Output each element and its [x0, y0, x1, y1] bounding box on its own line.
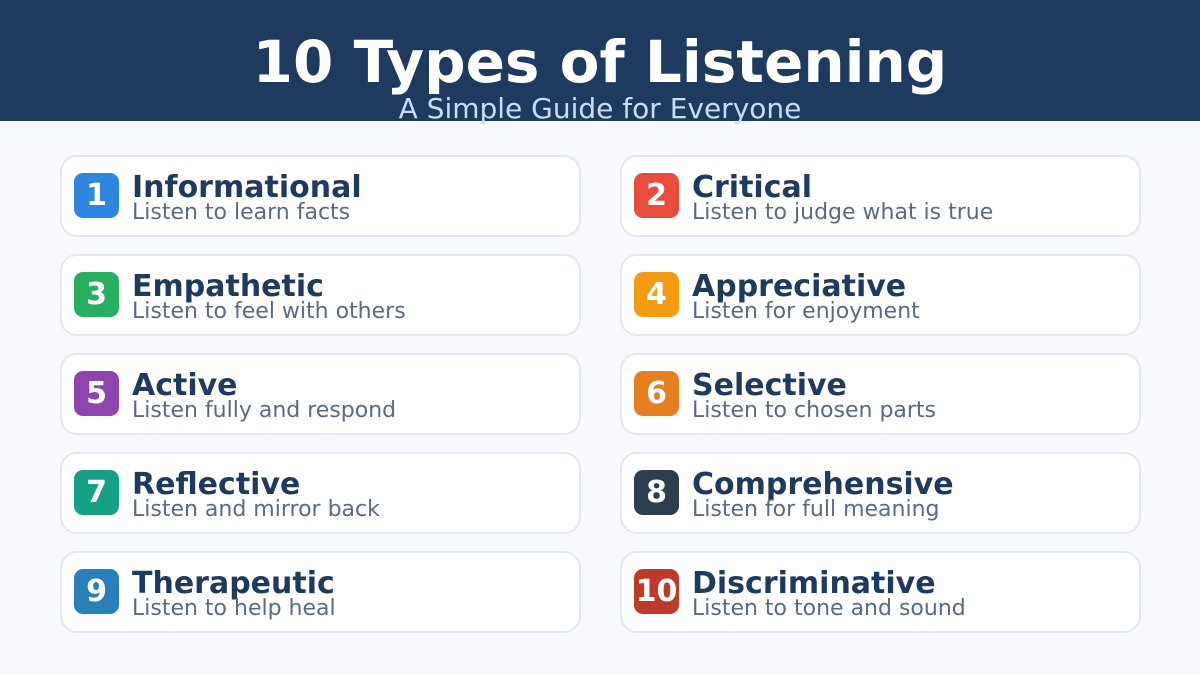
text: Empathetic: Empathetic — [132, 269, 324, 304]
text: Reflective: Reflective — [132, 467, 300, 502]
card 4: Appreciative — [621, 255, 1140, 335]
text: Informational — [132, 170, 362, 225]
badge 6 — [634, 371, 679, 416]
card 5: Active — [61, 354, 580, 434]
card 10: Discriminative — [621, 552, 1140, 632]
text: Discriminative: Listen to tone and sound — [692, 596, 966, 621]
text: Active — [132, 368, 396, 423]
text: Empathetic: Listen to feel with others — [132, 299, 406, 324]
text: Discriminative — [692, 566, 966, 621]
text: Selective: Listen to chosen parts — [692, 398, 936, 423]
card 8: Comprehensive — [621, 453, 1140, 533]
card 1: Informational — [61, 156, 580, 236]
text: Appreciative: Appreciative — [692, 269, 906, 304]
badge 10: 10 — [636, 574, 677, 609]
badge 7: 7 — [86, 475, 107, 510]
badge 6: 6 — [646, 376, 667, 411]
badge 7 — [74, 470, 119, 515]
badge 2 — [634, 173, 679, 218]
text: Appreciative: Listen for enjoyment — [692, 299, 920, 324]
badge 1: 1 — [86, 178, 107, 213]
text: Selective: Selective — [692, 368, 847, 403]
badge 3: 3 — [86, 277, 107, 312]
text: Reflective — [132, 467, 380, 522]
text: Discriminative: Discriminative — [692, 566, 936, 601]
text: Selective — [692, 368, 936, 423]
card 3: Empathetic — [61, 255, 580, 335]
card 7: Reflective — [61, 453, 580, 533]
text: Critical — [692, 170, 993, 225]
header banner — [0, 0, 1200, 121]
text: Comprehensive — [692, 467, 954, 522]
badge 5 — [74, 371, 119, 416]
badge 9: 9 — [86, 574, 107, 609]
text: Comprehensive: Listen for full meaning — [692, 497, 940, 522]
text: Therapeutic: Listen to help heal — [132, 596, 336, 621]
badge 1 — [74, 173, 119, 218]
card 6: Selective — [621, 354, 1140, 434]
badge 8 — [634, 470, 679, 515]
text: Comprehensive: Comprehensive — [692, 467, 954, 502]
subtitle: A Simple Guide for Everyone — [399, 92, 801, 125]
text: Critical: Listen to judge what is true — [692, 200, 993, 225]
badge 8: 8 — [646, 475, 667, 510]
title: 10 Types of Listening — [253, 28, 947, 96]
text: Active: Active — [132, 368, 238, 403]
text: Reflective: Listen and mirror back — [132, 497, 380, 522]
text: Empathetic — [132, 269, 406, 324]
badge 4: 4 — [646, 277, 667, 312]
text: Active: Listen fully and respond — [132, 398, 396, 423]
badge 3 — [74, 272, 119, 317]
badge 4 — [634, 272, 679, 317]
badge 2: 2 — [646, 178, 667, 213]
card 2: Critical — [621, 156, 1140, 236]
badge 9 — [74, 569, 119, 614]
badge 5: 5 — [86, 376, 107, 411]
text: Therapeutic — [132, 566, 336, 621]
text: Informational: Listen to learn facts — [132, 200, 350, 225]
text: Informational: Informational — [132, 170, 362, 205]
text: Therapeutic: Therapeutic — [132, 566, 335, 601]
card 9: Therapeutic — [61, 552, 580, 632]
text: Critical: Critical — [692, 170, 812, 205]
text: Appreciative — [692, 269, 920, 324]
